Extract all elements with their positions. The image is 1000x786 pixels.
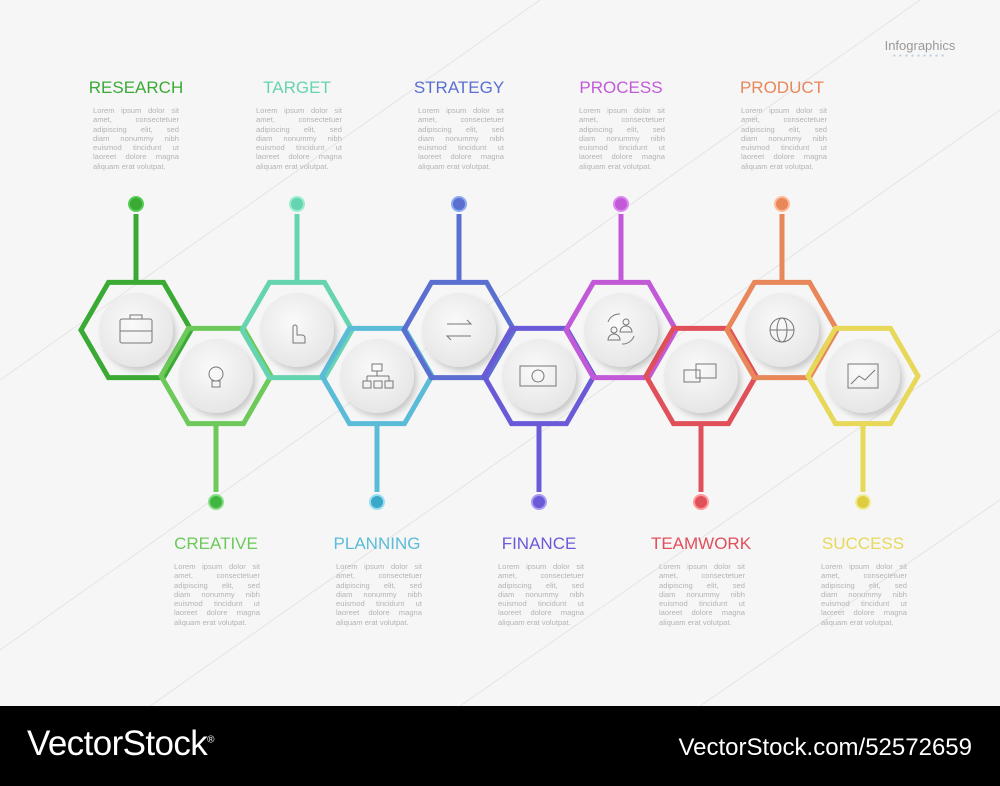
- text blocks bottom: aliquam erat volutpat.: [174, 618, 247, 627]
- text: Lorem ipsum dolor sit: [498, 562, 584, 571]
- text: diam nonummy nibh: [256, 134, 342, 143]
- text: euismod tincidunt ut: [418, 143, 504, 152]
- text: Lorem ipsum dolor sit: [579, 106, 665, 115]
- text: Lorem ipsum dolor sit: [659, 562, 745, 571]
- text: adipiscing elit, sed: [256, 125, 342, 134]
- text: diam nonummy nibh: [336, 590, 422, 599]
- text: STRATEGY: [414, 78, 504, 97]
- text blocks bottom: laoreet dolore magna: [174, 608, 260, 617]
- text: diam nonummy nibh: [579, 134, 665, 143]
- text blocks bottom: diam nonummy nibh: [174, 590, 260, 599]
- text: euismod tincidunt ut: [579, 143, 665, 152]
- text: Lorem ipsum dolor sit: [821, 562, 907, 571]
- text: amet, consectetuer: [336, 571, 422, 580]
- text: FINANCE: [502, 534, 576, 553]
- text: TEAMWORK: [651, 534, 751, 553]
- connectors & dots: [129, 197, 870, 509]
- text: euismod tincidunt ut: [256, 143, 342, 152]
- text: adipiscing elit, sed: [336, 581, 422, 590]
- text blocks bottom: euismod tincidunt ut: [174, 599, 260, 608]
- text: laoreet dolore magna: [821, 608, 907, 617]
- text: aliquam erat volutpat.: [821, 618, 894, 627]
- text: aliquam erat volutpat.: [498, 618, 571, 627]
- text: diam nonummy nibh: [498, 590, 584, 599]
- text: adipiscing elit, sed: [418, 125, 504, 134]
- text: aliquam erat volutpat.: [741, 162, 814, 171]
- text: adipiscing elit, sed: [821, 581, 907, 590]
- text: amet, consectetuer: [256, 115, 342, 124]
- text: euismod tincidunt ut: [336, 599, 422, 608]
- text: Lorem ipsum dolor sit: [741, 106, 827, 115]
- text: adipiscing elit, sed: [659, 581, 745, 590]
- text: Lorem ipsum dolor sit: [418, 106, 504, 115]
- text: TARGET: [263, 78, 331, 97]
- text blocks bottom: Lorem ipsum dolor sit: [174, 562, 260, 571]
- footer bar: VectorStock®: [27, 724, 214, 763]
- text: Lorem ipsum dolor sit: [256, 106, 342, 115]
- text: SUCCESS: [822, 534, 904, 553]
- text: euismod tincidunt ut: [741, 143, 827, 152]
- text: amet, consectetuer: [821, 571, 907, 580]
- text: amet, consectetuer: [418, 115, 504, 124]
- text: PLANNING: [334, 534, 420, 553]
- text: amet, consectetuer: [659, 571, 745, 580]
- text: aliquam erat volutpat.: [659, 618, 732, 627]
- text: euismod tincidunt ut: [498, 599, 584, 608]
- text blocks top: laoreet dolore magna: [93, 152, 179, 161]
- text: diam nonummy nibh: [741, 134, 827, 143]
- circles: [99, 293, 900, 413]
- text: laoreet dolore magna: [579, 152, 665, 161]
- titles bottom: CREATIVE: [174, 534, 258, 553]
- logo: Infographics: ●●●●●●●●●: [893, 53, 947, 59]
- text: laoreet dolore magna: [498, 608, 584, 617]
- text blocks top: Lorem ipsum dolor sit: [93, 106, 179, 115]
- text: euismod tincidunt ut: [821, 599, 907, 608]
- text: laoreet dolore magna: [418, 152, 504, 161]
- text blocks top: [93, 106, 179, 171]
- hexagons: [81, 282, 918, 424]
- text: adipiscing elit, sed: [579, 125, 665, 134]
- footer bar: [0, 706, 1000, 786]
- text blocks bottom: [174, 562, 260, 627]
- text: amet, consectetuer: [579, 115, 665, 124]
- footer bar: VectorStock.com/52572659: [678, 734, 972, 761]
- text: aliquam erat volutpat.: [256, 162, 329, 171]
- text: amet, consectetuer: [741, 115, 827, 124]
- text: laoreet dolore magna: [659, 608, 745, 617]
- text blocks top: diam nonummy nibh: [93, 134, 179, 143]
- text: aliquam erat volutpat.: [336, 618, 409, 627]
- text: adipiscing elit, sed: [498, 581, 584, 590]
- text blocks top: aliquam erat volutpat.: [93, 162, 166, 171]
- text: laoreet dolore magna: [256, 152, 342, 161]
- text: laoreet dolore magna: [336, 608, 422, 617]
- logo: Infographics: Infographics: [885, 38, 955, 53]
- text: PRODUCT: [740, 78, 824, 97]
- text: amet, consectetuer: [498, 571, 584, 580]
- text blocks top: amet, consectetuer: [93, 115, 179, 124]
- text: aliquam erat volutpat.: [418, 162, 491, 171]
- text blocks bottom: adipiscing elit, sed: [174, 581, 260, 590]
- text: diam nonummy nibh: [418, 134, 504, 143]
- text: euismod tincidunt ut: [659, 599, 745, 608]
- text: adipiscing elit, sed: [741, 125, 827, 134]
- text blocks bottom: amet, consectetuer: [174, 571, 260, 580]
- titles top: RESEARCH: [89, 78, 183, 97]
- text: aliquam erat volutpat.: [579, 162, 652, 171]
- text: diam nonummy nibh: [821, 590, 907, 599]
- text: PROCESS: [579, 78, 663, 97]
- text blocks top: euismod tincidunt ut: [93, 143, 179, 152]
- icons: [120, 314, 878, 388]
- text: laoreet dolore magna: [741, 152, 827, 161]
- text: Lorem ipsum dolor sit: [336, 562, 422, 571]
- text: diam nonummy nibh: [659, 590, 745, 599]
- text blocks top: adipiscing elit, sed: [93, 125, 179, 134]
